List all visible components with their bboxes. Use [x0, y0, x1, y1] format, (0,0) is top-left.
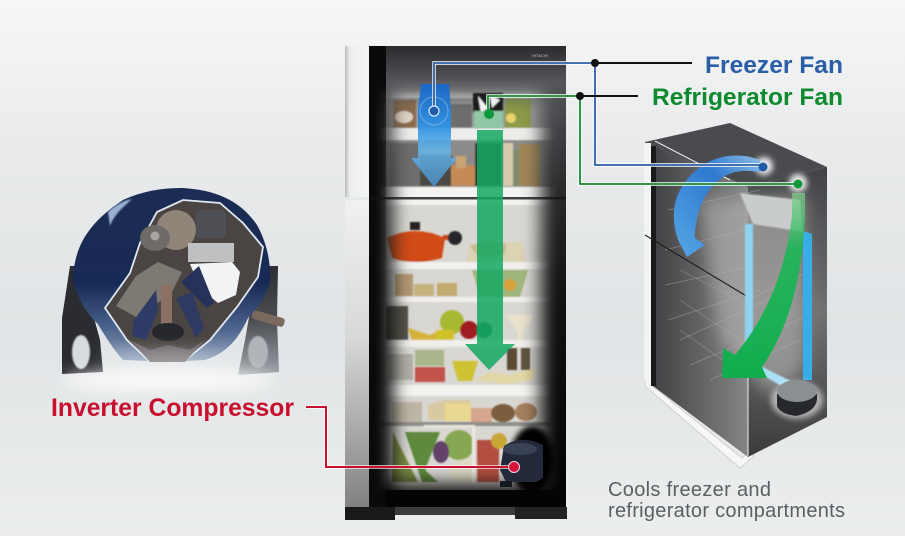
green cooling arrow in refrigerator: [465, 130, 515, 370]
side view caption: refrigerator compartments: [608, 500, 845, 522]
side fan glows: [755, 157, 807, 192]
refrigerator shelf items: [380, 222, 550, 483]
inverter compressor callout line: [306, 407, 520, 472]
left face: [645, 142, 748, 457]
freezer shelf items: [380, 92, 555, 205]
door side shadow: [369, 46, 386, 507]
blue curved arrow: [670, 155, 760, 257]
freezer fan callout lines: [429, 59, 768, 172]
door split line: [645, 235, 748, 297]
small compressor inside fridge: [500, 440, 543, 487]
top face: [645, 123, 827, 187]
inverter compressor label: Inverter Compressor: [51, 394, 294, 422]
fridge contents: [375, 80, 560, 490]
right face: [748, 167, 827, 457]
blue cooling arrow in freezer: [411, 84, 457, 187]
black door band: [651, 146, 656, 386]
divider between doors: [369, 197, 566, 200]
main refrigerator: [345, 46, 567, 520]
fridge body: [369, 46, 566, 507]
brand mark: HITACHI: [532, 53, 548, 58]
silver door edge: refrigerator: [345, 200, 369, 507]
side view caption: Cools freezer and: [608, 479, 771, 501]
mounting brackets: [62, 266, 285, 375]
fridge feet: [345, 507, 567, 520]
shell highlights: [108, 199, 132, 226]
green curved arrow: [722, 193, 805, 378]
silver door edge: freezer: [345, 46, 369, 197]
refrigerator fan unit: [473, 93, 503, 128]
side compressor: [771, 380, 823, 419]
front corner edge: [747, 280, 749, 456]
cutaway interior: [105, 200, 263, 362]
base plinth: [645, 380, 754, 468]
lit interior glow: [375, 80, 560, 490]
compressor cutaway illustration: [62, 188, 285, 389]
interior shelves: [665, 190, 812, 390]
compressor shell: [73, 188, 270, 362]
refrigerator fan label: Refrigerator Fan: [652, 84, 843, 111]
lower right shadow: [510, 426, 554, 494]
interior panel: [740, 193, 803, 232]
side view caption: [608, 479, 845, 522]
top door highlight: [655, 141, 730, 180]
glowing interior: [700, 195, 805, 395]
side cutaway refrigerator: [644, 123, 827, 468]
freezer fan label: Freezer Fan: [705, 52, 843, 79]
cold mist: [63, 352, 273, 389]
blue air ducts: [745, 224, 812, 388]
refrigerator fan callout lines: [484, 92, 802, 188]
white door edge: [644, 143, 651, 385]
